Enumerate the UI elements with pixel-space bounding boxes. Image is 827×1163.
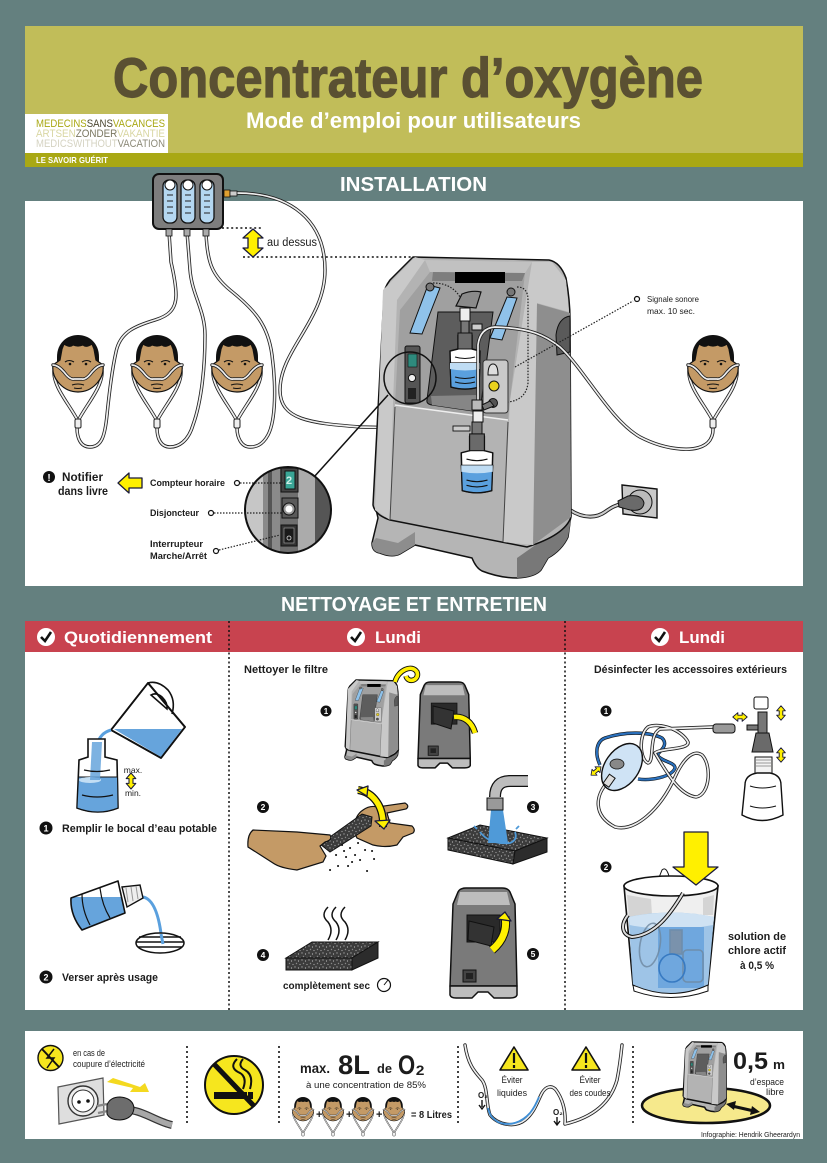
step 1: turn machine and remove filter: 1 — [324, 707, 329, 716]
avoid liquids and kinks: liquides — [497, 1088, 527, 1098]
step 4: let filter dry — [257, 907, 390, 992]
step 3: rinse filter under tap: 3 — [531, 802, 536, 812]
header: monday filter: Lundi — [375, 628, 421, 647]
labels: control panel: Disjoncteur — [150, 508, 199, 519]
max 8 litres: max. — [300, 1060, 330, 1076]
header: monday filter — [347, 628, 421, 647]
illustration: fill the jar: min. — [125, 788, 141, 798]
logo: MEDICSWITHOUTVACATION — [36, 138, 165, 150]
heading: cleaning and maintenance: NETTOYAGE ET ENTRETIEN — [281, 594, 547, 616]
logo: ARTSENZONDERVAKANTIE — [36, 128, 165, 140]
max 8 litres: + — [346, 1109, 352, 1121]
power cord and wall socket — [570, 485, 657, 518]
step 2: tap filter in hand — [248, 786, 414, 871]
step 3: rinse filter under tap — [448, 781, 547, 864]
step: fill with drinking water: Remplir le bocal d’eau potable — [62, 823, 217, 835]
max 8 litres: 8L — [338, 1050, 370, 1080]
callout: sound signal: Signale sonore — [647, 294, 699, 304]
max 8 litres: à une concentration de 85% — [306, 1080, 427, 1091]
clearance 0.5 m: libre — [766, 1087, 784, 1097]
lower humidifier bottle — [453, 400, 494, 493]
oxygen concentrator — [372, 257, 571, 578]
step 5: put filter back — [450, 888, 539, 998]
avoid liquids and kinks: O₂ — [553, 1108, 563, 1117]
height marker — [222, 228, 412, 257]
header: daily: Quotidiennement — [64, 628, 212, 647]
step 2: immerse in chlorine bucket — [600, 832, 786, 998]
max 8 litres: O₂ — [398, 1050, 425, 1080]
step 1: mask, tubing and humidifier parts: 1 — [604, 707, 609, 716]
subtitle: Mode d’emploi pour utilisateurs — [246, 108, 581, 133]
tagline: LE SAVOIR GUÉRIT — [36, 155, 109, 165]
avoid liquids and kinks: des coudes — [570, 1088, 611, 1098]
text: clean the filter: Nettoyer le filtre — [244, 664, 328, 676]
note: notify in book: dans livre — [58, 484, 108, 498]
max 8 litres: + — [376, 1109, 382, 1121]
logo: MEDECINSSANSVACANCES — [36, 118, 165, 130]
panel: installation — [25, 174, 803, 586]
labels: control panel — [150, 478, 283, 562]
step 2: immerse in chlorine bucket: solution de — [728, 931, 786, 943]
header: monday accessories: Lundi — [679, 628, 725, 647]
step 1: mask, tubing and humidifier parts — [589, 697, 785, 828]
avoid liquids and kinks: Éviter — [580, 1075, 600, 1085]
power cut: unplug: coupure d’électricité — [73, 1059, 145, 1069]
header banner — [25, 26, 803, 167]
control panel circle on machine — [384, 352, 436, 404]
callout: sound signal: max. 10 sec. — [647, 306, 695, 316]
step: pour after use: 2 — [43, 972, 49, 982]
step 1: turn machine and remove filter — [320, 668, 475, 768]
power cut: unplug: en cas de — [73, 1048, 105, 1058]
no smoking sign — [205, 1056, 263, 1114]
leader to zoom detail — [314, 395, 388, 477]
callout: sound signal — [515, 294, 699, 367]
dotted hint lines on machine — [433, 283, 528, 402]
step 2: immerse in chlorine bucket: à 0,5 % — [740, 960, 774, 972]
note: notify in book — [43, 470, 142, 498]
max 8 litres: + — [316, 1109, 322, 1121]
step: pour after use: Verser après usage — [62, 972, 158, 984]
labels: control panel: Marche/Arrêt — [150, 551, 208, 562]
oxygen tubes to flowmeter and patients — [77, 193, 453, 447]
tube to right patient — [472, 324, 713, 449]
clearance 0.5 m: m — [773, 1057, 785, 1072]
labels: control panel: Compteur horaire — [150, 478, 225, 489]
step 4: let filter dry: 4 — [261, 950, 266, 960]
patient heads — [53, 335, 262, 428]
zoomed control panel — [244, 466, 332, 554]
step: pour after use — [40, 970, 158, 984]
illustration: fill the jar — [77, 682, 185, 812]
note: notify in book: Notifier — [62, 470, 103, 484]
panel: warnings footer — [25, 1031, 803, 1139]
zoomed control panel: 2 — [286, 475, 292, 487]
power cut: unplug — [38, 1046, 172, 1125]
step 5: put filter back: 5 — [531, 949, 536, 959]
upper humidifier bottle — [450, 291, 481, 389]
step 2: immerse in chlorine bucket: chlore actif — [728, 945, 786, 957]
step 4: let filter dry: complètement sec — [283, 980, 370, 992]
labels: control panel: Interrupteur — [150, 539, 203, 550]
step 2: tap filter in hand: 2 — [261, 802, 266, 812]
credit: Infographie: Hendrik Gheerardyn — [701, 1132, 800, 1139]
max 8 litres — [292, 1050, 452, 1136]
step: fill with drinking water: 1 — [43, 824, 49, 834]
panel: cleaning — [25, 621, 803, 1010]
heading: installation: INSTALLATION — [340, 174, 487, 196]
illustration: empty the jar — [71, 881, 184, 953]
step 2: immerse in chlorine bucket: 2 — [604, 863, 609, 872]
right patient head — [688, 335, 738, 428]
max 8 litres: de — [377, 1061, 392, 1076]
note: notify in book: ! — [47, 473, 51, 484]
illustration: fill the jar: max. — [124, 765, 142, 775]
avoid liquids and kinks: Éviter — [502, 1075, 522, 1085]
text: disinfect accessories: Désinfecter les accessoires extérieurs — [594, 664, 787, 676]
clearance 0.5 m: d’espace — [750, 1077, 784, 1087]
logo — [25, 114, 168, 153]
max 8 litres: = 8 Litres — [411, 1110, 452, 1121]
clearance 0.5 m — [642, 1042, 785, 1123]
flowmeter block — [153, 174, 237, 236]
avoid liquids and kinks: O₂ — [478, 1091, 488, 1100]
avoid liquids and kinks — [465, 1045, 622, 1125]
height marker: au dessus — [267, 237, 317, 249]
clearance 0.5 m: 0,5 — [733, 1048, 768, 1075]
title: Concentrateur d’oxygène — [113, 46, 703, 109]
header: monday accessories — [651, 628, 725, 647]
